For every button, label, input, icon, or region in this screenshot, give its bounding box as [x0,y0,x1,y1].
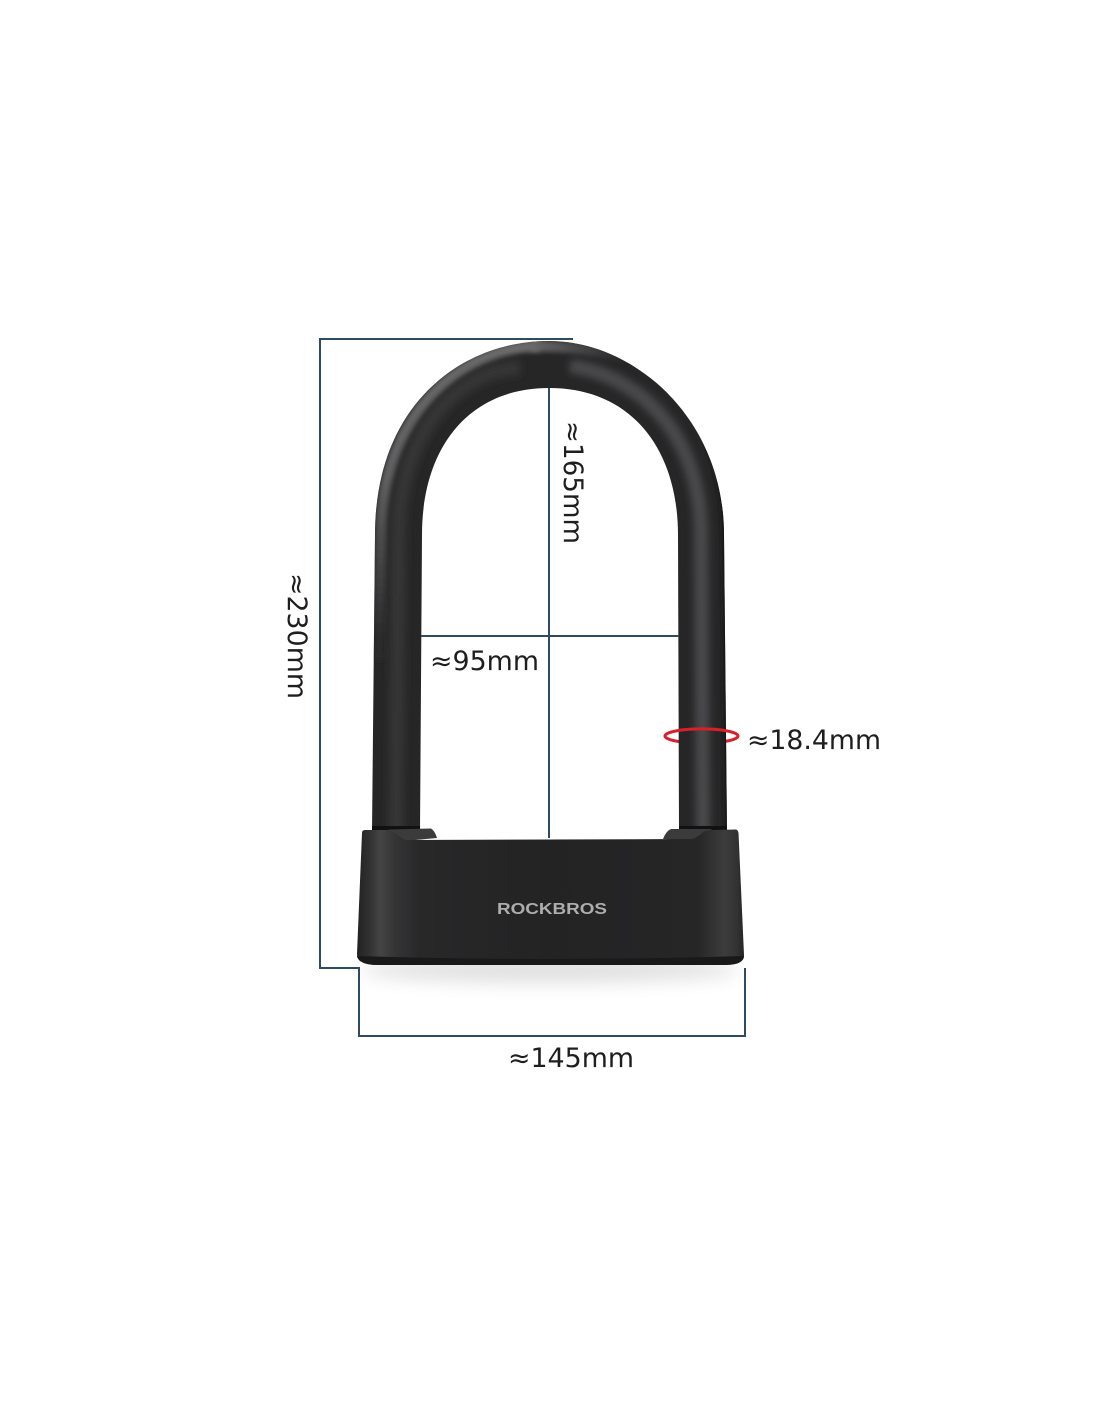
lock body [357,828,744,965]
shackle [370,341,730,832]
label: inner width: ≈95mm [430,646,539,677]
label: overall width: ≈145mm [508,1043,634,1074]
red ring: back half [665,736,738,743]
dimension line: inner width [421,635,679,637]
label: overall height: ≈230mm [281,573,312,699]
stem bases [372,826,727,830]
body base strip [357,956,744,965]
red ring: front arc [665,729,738,736]
left outer edge sheen [379,346,540,660]
floor shadow [360,957,740,983]
brand logo: ROCKBROS [497,901,607,918]
label: shackle diameter: ≈18.4mm [747,725,881,756]
left collar pad [388,828,437,841]
top edge sheen fading to the right [530,346,625,358]
label: inner height: ≈165mm [557,421,588,544]
right centre band [570,366,703,832]
body block [357,830,744,965]
right collar pad [663,829,712,841]
dimension line: inner height [548,388,550,838]
infographic: U-lock dimensions [288,338,879,1068]
right outer dark edge [700,438,727,826]
left centre band [396,368,520,832]
dimension lines: overall height and width [320,339,745,1036]
